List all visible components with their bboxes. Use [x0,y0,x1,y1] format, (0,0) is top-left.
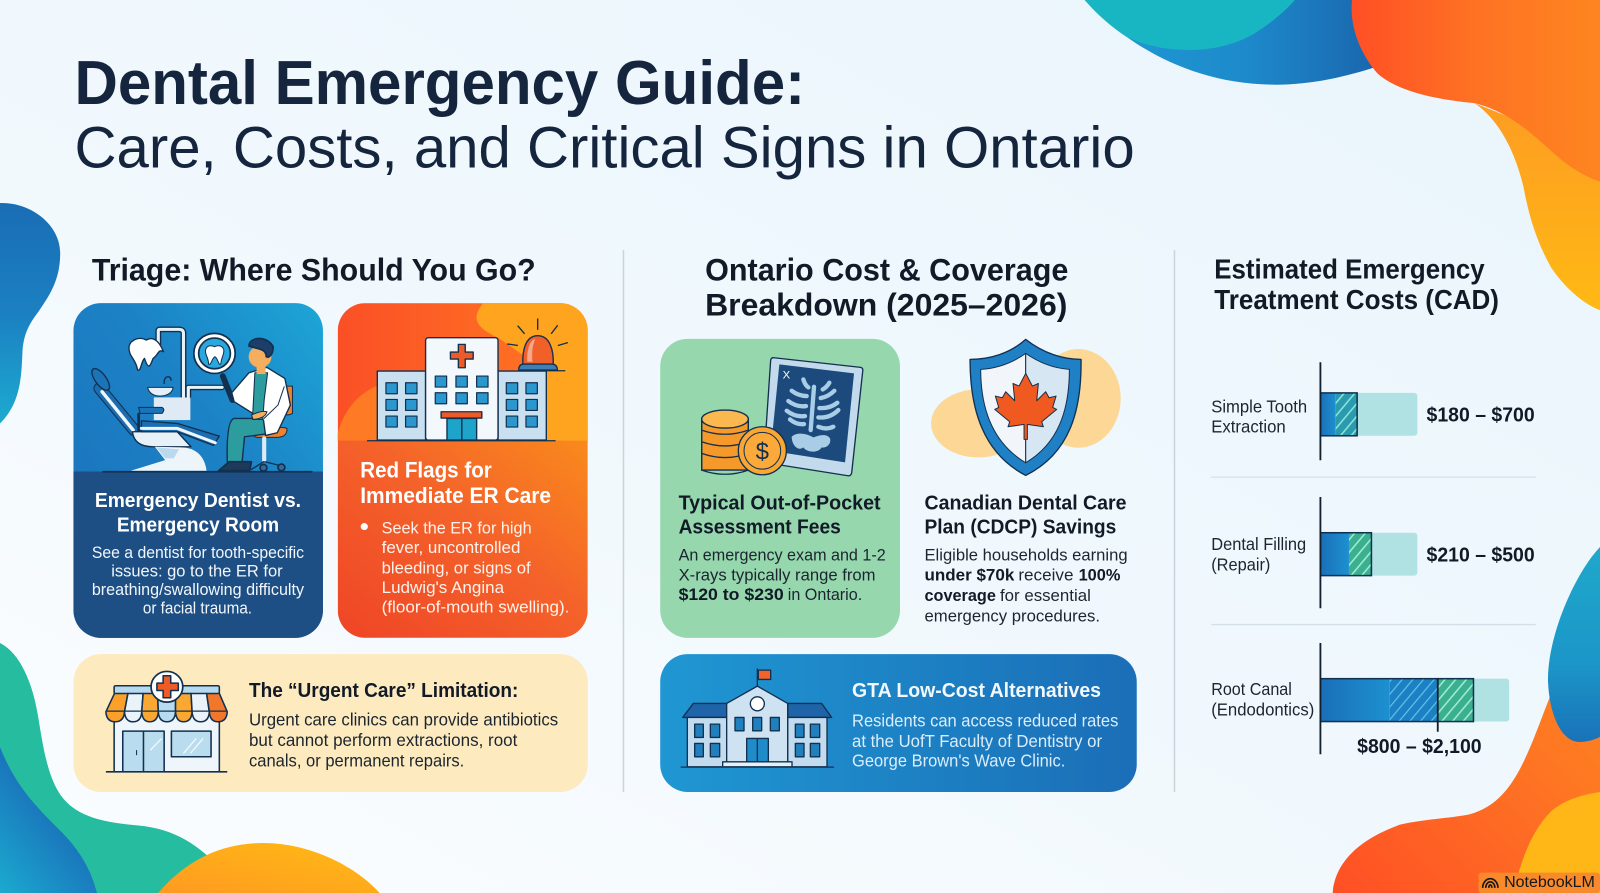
body text: or facial trauma. [143,599,252,617]
body text: Eligible households earning [924,545,1128,564]
icon: hospital with siren [367,319,567,441]
body text: under $70k [924,566,1015,585]
icon: urgent care storefront [106,671,227,772]
panel: out-of-pocket fees [660,339,900,638]
row: simple tooth extraction: Extraction [1211,417,1286,437]
heading: Emergency Dentist vs. [95,490,301,512]
body text: but cannot perform extractions, root [249,730,518,750]
body text: Seek the ER for high [382,519,532,538]
body text: Ludwig's Angina [382,578,505,597]
heading: Emergency Room [117,515,279,537]
icon: x-ray and coins [702,358,863,476]
panel: emergency dentist [73,303,323,638]
decorative blob: left blue [0,203,60,424]
body text [924,545,1128,626]
row: simple tooth extraction [1211,362,1535,460]
icon: shield with maple leaf [931,339,1121,475]
icon: notebook arcs [1483,879,1498,888]
decorative blob: top right orange [1352,0,1600,182]
body text: George Brown's Wave Clinic. [852,750,1065,770]
heading: cost and coverage: Breakdown (2025–2026) [705,286,1067,322]
icon: dentist with chair [89,329,312,472]
row: root canal [1211,643,1509,758]
body text [92,544,305,617]
heading: Immediate ER Care [360,483,551,508]
heading [95,490,301,537]
body text: coverage [924,586,996,605]
heading: triage: Triage: Where Should You Go? [92,252,536,288]
decorative blob: bottom right orange [1333,612,1600,893]
row: simple tooth extraction: $180 – $700 [1427,404,1535,426]
panel: urgent care limitation [73,654,588,792]
body text: Residents can access reduced rates [852,711,1119,731]
body text: An emergency exam and 1-2 [679,545,886,564]
body text: X-rays typically range from [679,566,876,585]
row: root canal: $800 – $2,100 [1357,736,1482,758]
decorative blob: right blue [1548,547,1600,742]
icon: x-ray and coins: X [783,370,791,382]
decorative blob: bottom left green [0,643,235,893]
body text: (floor-of-mouth swelling). [382,597,569,616]
body text: issues: go to the ER for [111,563,283,581]
panel: red flags [336,300,591,638]
body text: breathing/swallowing difficulty [92,581,305,599]
row: root canal: (Endodontics) [1211,699,1314,719]
heading: Typical Out-of-Pocket [679,492,881,514]
bullet [361,523,368,530]
body text: emergency procedures. [924,607,1100,626]
body text [249,710,558,770]
decorative blob: top right blue [1085,0,1378,85]
body text: Urgent care clinics can provide antibiotics [249,710,558,730]
panel: cdcp savings [924,339,1128,626]
watermark: NotebookLM: NotebookLM [1504,874,1595,891]
body text: bleeding, or signs of [382,559,531,578]
body text: for essential [1000,586,1091,605]
heading: estimated treatment costs: Estimated Emergency [1214,254,1485,285]
body text: at the UofT Faculty of Dentistry or [852,731,1102,751]
decorative blob: top right teal [1085,0,1295,50]
row: simple tooth extraction: Simple Tooth [1211,396,1307,416]
icon: university building [681,668,834,767]
title: Care, Costs, and Critical Signs in Ontario [74,115,1135,180]
decorative blob: bottom left yellow [158,843,380,893]
title: Dental Emergency Guide: [74,49,805,118]
heading: Plan (CDCP) Savings [924,517,1116,539]
heading: GTA Low-Cost Alternatives [852,680,1101,702]
decorative blob: bottom left blue [0,747,97,893]
heading [679,492,881,539]
heading: Canadian Dental Care [924,492,1127,514]
body text [852,711,1119,770]
body text [382,519,569,616]
body text: $120 to $230 [679,585,784,604]
row: root canal: Root Canal [1211,679,1292,699]
row: dental filling [1211,497,1535,608]
chart: treatment cost bars [1211,362,1536,758]
heading: Assessment Fees [679,517,841,539]
watermark: NotebookLM [1479,873,1600,893]
body text: in Ontario. [788,585,862,604]
icon: x-ray and coins: $ [756,438,769,465]
panel: gta low-cost alternatives [660,654,1137,792]
row: dental filling: (Repair) [1211,554,1270,574]
decorative blob: bottom right yellow [1513,792,1600,893]
body text: fever, uncontrolled [382,538,520,557]
heading: cost and coverage: Ontario Cost & Coverage [705,252,1068,288]
heading: The “Urgent Care” Limitation: [249,680,518,702]
body text: See a dentist for tooth-specific [92,544,304,562]
row: dental filling: Dental Filling [1211,534,1306,554]
body text: receive [1018,566,1073,585]
heading: estimated treatment costs: Treatment Costs (CAD) [1214,284,1499,315]
body text [679,545,886,604]
body text: 100% [1079,566,1120,585]
decorative blob: top right yellow [1474,103,1600,310]
row: dental filling: $210 – $500 [1427,544,1535,566]
dividers [623,250,1174,792]
heading: cost and coverage [705,252,1068,322]
heading [360,458,551,508]
heading [924,492,1127,539]
heading: Red Flags for [360,458,492,483]
body text: canals, or permanent repairs. [249,750,464,770]
title [74,49,1135,180]
heading: estimated treatment costs [1214,254,1499,315]
